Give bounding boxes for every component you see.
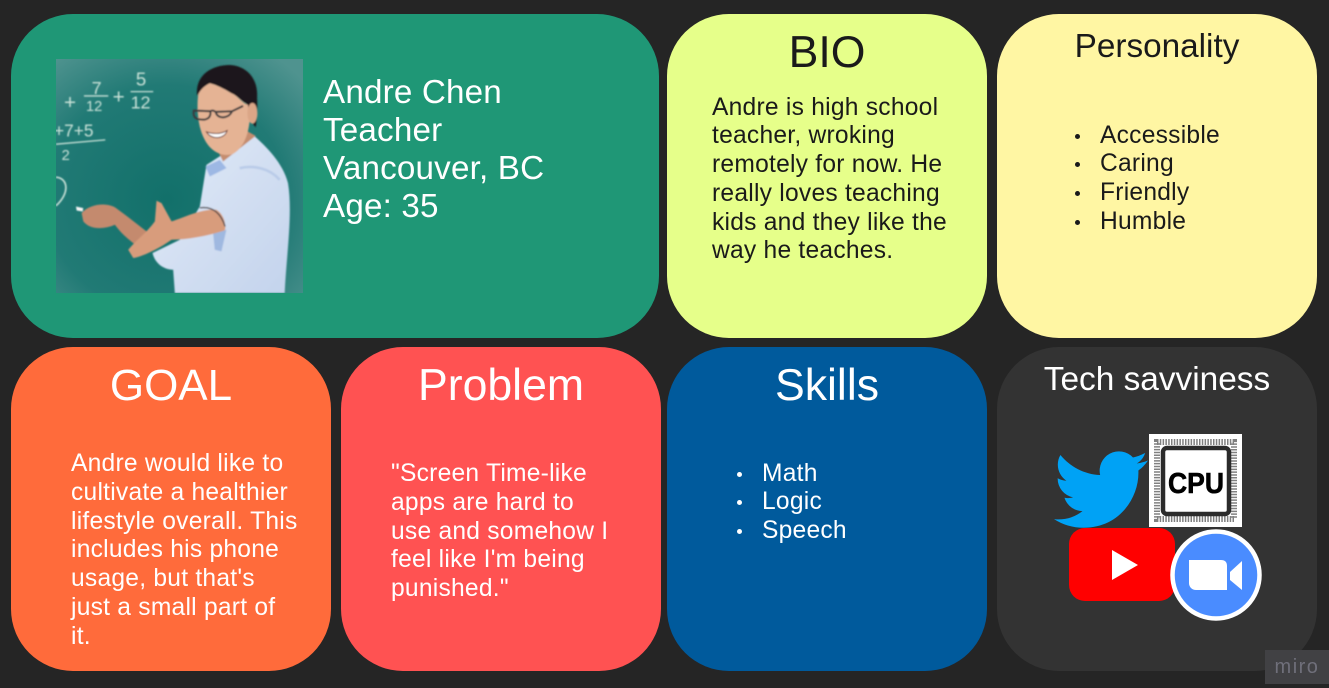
- list: personality traits: Friendly: [1100, 179, 1189, 206]
- text: goal body: includes his phone: [71, 536, 279, 563]
- outstretched arm and hand: [128, 201, 225, 258]
- shirt: [153, 135, 290, 293]
- text: bio body: really loves teaching: [712, 180, 940, 207]
- text: problem quote: use and somehow I: [391, 518, 608, 545]
- text: bio body: kids and they like the: [712, 209, 947, 236]
- panel: problem: [341, 347, 661, 671]
- list: personality traits: Caring: [1100, 150, 1174, 177]
- photo: teacher at chalkboard: 2: [62, 148, 70, 164]
- text: problem quote: [391, 460, 608, 602]
- icon: CPU chip: CPU: [1168, 468, 1224, 500]
- text: name and details: Andre Chen: [323, 74, 502, 111]
- watermark: miro: miro: [1275, 656, 1319, 678]
- list: personality traits: Humble: [1100, 208, 1186, 235]
- text: goal body: [70, 450, 298, 650]
- text: goal body: usage, but that's: [71, 565, 255, 592]
- heading: Skills: Skills: [775, 361, 879, 410]
- text: goal body: Andre would like to: [71, 450, 283, 477]
- list: skills: [737, 460, 847, 544]
- heading: Personality: Personality: [1075, 28, 1239, 65]
- icon: twitter bird: [1054, 451, 1148, 528]
- photo: teacher at chalkboard: 12: [86, 99, 102, 115]
- photo: teacher at chalkboard: +: [113, 85, 125, 108]
- panel: skills: [667, 347, 987, 671]
- mouth: [206, 131, 227, 138]
- photo: teacher at chalkboard: [56, 59, 303, 293]
- heading: Problem: Problem: [418, 361, 584, 410]
- text: problem quote: punished.": [391, 575, 509, 602]
- list: skills: Logic: [762, 488, 822, 515]
- text: problem quote: feel like I'm being: [391, 546, 585, 573]
- arm: pointing at board: [80, 204, 147, 244]
- watermark: miro: [1265, 650, 1329, 684]
- photo: teacher at chalkboard: +: [64, 91, 76, 114]
- text: name and details: [323, 74, 544, 225]
- text: name and details: Teacher: [323, 112, 442, 149]
- text: bio body: [712, 94, 947, 264]
- heading: GOAL: GOAL: [110, 361, 232, 410]
- text: bio body: Andre is high school: [712, 94, 938, 120]
- icon: YouTube: [1069, 528, 1175, 601]
- text: bio body: teacher, wroking: [712, 122, 895, 149]
- heading: Tech savviness: Tech savviness: [1044, 360, 1270, 398]
- text: problem quote: apps are hard to: [391, 489, 574, 516]
- text: name and details: Vancouver, BC: [323, 150, 544, 187]
- hair: [197, 65, 257, 127]
- glasses: [194, 106, 243, 120]
- text: problem quote: "Screen Time-like: [391, 460, 587, 487]
- text: goal body: cultivate a healthier: [71, 479, 288, 506]
- heading: BIO: BIO: [789, 28, 865, 77]
- text: goal body: lifestyle overall. This: [71, 508, 298, 535]
- panel: profile: [11, 14, 659, 338]
- ear: [247, 103, 257, 124]
- photo: teacher at chalkboard: 7: [92, 78, 102, 98]
- panel: tech savviness: [997, 347, 1317, 671]
- neck: [218, 130, 256, 162]
- photo: teacher at chalkboard: 5: [136, 69, 146, 90]
- text: goal body: it.: [71, 623, 91, 650]
- icon: Zoom: [1170, 529, 1262, 621]
- list: skills: Speech: [762, 517, 847, 544]
- panel: personality: [997, 14, 1317, 338]
- list: skills: Math: [762, 460, 818, 486]
- text: goal body: just a small part of: [71, 594, 275, 621]
- text: bio body: remotely for now. He: [712, 151, 942, 178]
- text: bio body: way he teaches.: [712, 237, 893, 264]
- photo: teacher at chalkboard: 12: [131, 93, 151, 113]
- face: [198, 83, 250, 155]
- list: personality traits: [1075, 122, 1220, 235]
- panel: goal: [11, 347, 331, 671]
- list: personality traits: Accessible: [1100, 122, 1220, 148]
- text: name and details: Age: 35: [323, 188, 439, 225]
- icon: CPU chip: [1149, 434, 1242, 527]
- panel: bio: [667, 14, 987, 338]
